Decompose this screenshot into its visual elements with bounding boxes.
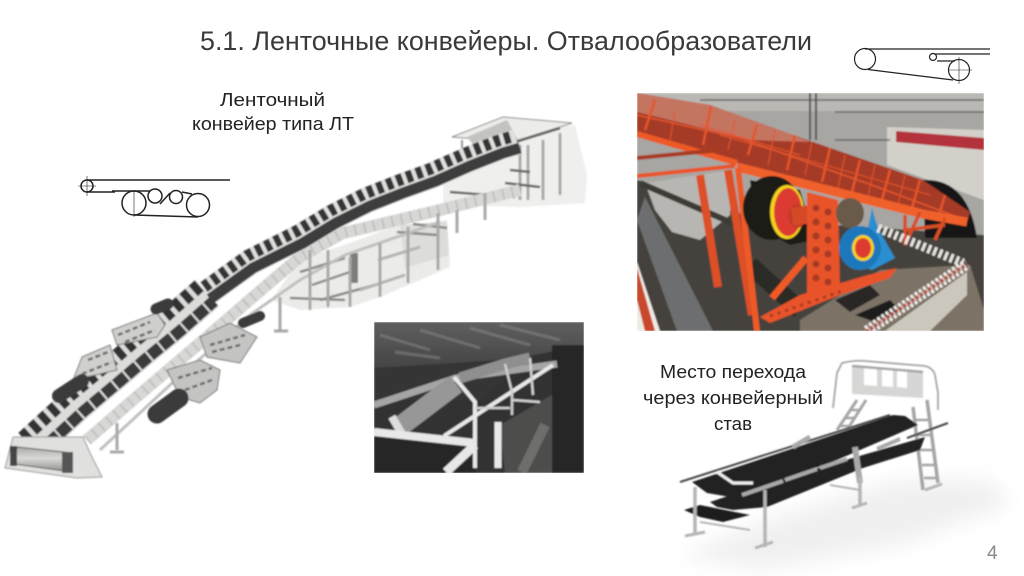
label: belt conveyor type LT: конвейер типа ЛТ — [192, 113, 354, 134]
hopper — [443, 117, 587, 207]
conveyor belts — [684, 505, 750, 522]
gearboxes and motors — [59, 304, 260, 414]
brown cover — [836, 198, 864, 228]
photo: bw conveyor in mine — [374, 322, 584, 473]
illustration: long belt conveyor — [5, 117, 587, 478]
base — [760, 268, 897, 323]
icon: belt scheme left — [78, 176, 230, 217]
floor shadow — [680, 480, 1010, 570]
legs — [700, 175, 718, 287]
rails — [680, 415, 948, 482]
belt idlers — [23, 136, 520, 454]
drum — [743, 176, 801, 240]
machinery under belt — [271, 220, 450, 310]
back wall left — [645, 170, 730, 240]
label: belt conveyor type LT — [192, 89, 354, 134]
photo: orange conveyor drive — [637, 93, 984, 331]
label: crossing place — [643, 361, 823, 434]
floor — [637, 180, 984, 331]
legs — [685, 477, 942, 548]
title: 5.1. Ленточные конвейеры. Отвалообразователи — [200, 26, 812, 56]
page number: 4 — [987, 543, 998, 564]
label: crossing place: став — [714, 413, 752, 434]
icon: belt scheme top right — [854, 48, 990, 84]
platform — [833, 361, 938, 490]
tunnel — [923, 180, 977, 238]
label: belt conveyor type LT: Ленточный — [220, 89, 325, 110]
blue gearbox — [868, 208, 896, 271]
tail drum — [5, 437, 102, 478]
dark belt — [640, 180, 732, 225]
lattice frame — [807, 192, 840, 305]
illustration: crossing platform over conveyor — [643, 361, 1010, 570]
walkway mesh — [637, 111, 970, 221]
idler frames — [742, 437, 900, 495]
fences — [878, 228, 963, 263]
label: crossing place: через конвейерный — [643, 387, 823, 408]
concrete ledge — [637, 197, 713, 331]
label: crossing place: Место перехода — [660, 361, 807, 382]
right frame — [905, 212, 945, 245]
main beams — [637, 134, 737, 163]
conveyor support frame — [87, 190, 520, 452]
